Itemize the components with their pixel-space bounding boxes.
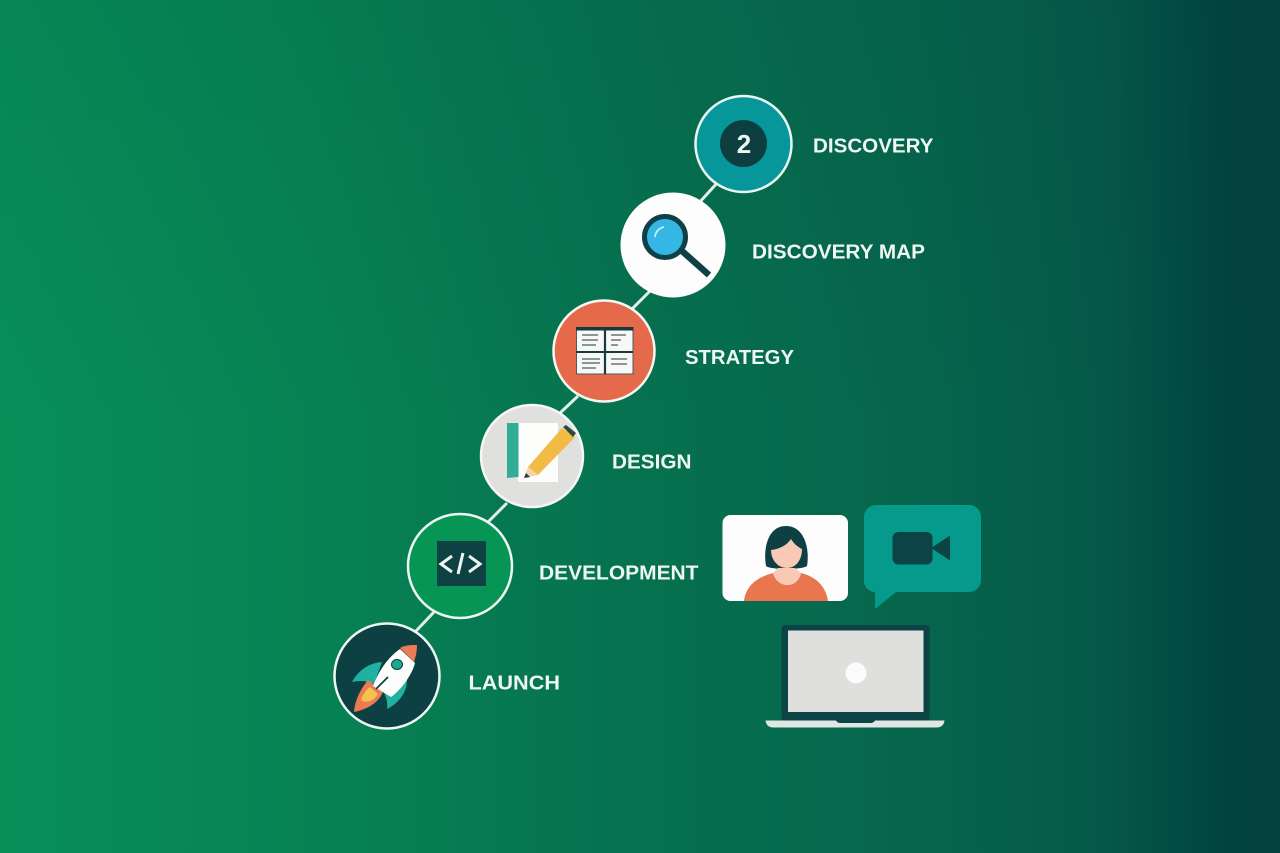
strategy label: STRATEGY [685, 347, 795, 369]
step 5: development [408, 514, 698, 618]
person hair [765, 526, 808, 569]
person video card [722, 515, 848, 601]
laptop [766, 625, 944, 728]
discovery label: DISCOVERY [813, 136, 934, 158]
step 4: design [481, 405, 692, 507]
strategy circle [554, 300, 654, 402]
icon: strategy book [576, 327, 634, 374]
speech bubble with camera [864, 505, 981, 609]
person shoulders [744, 573, 828, 601]
design circle [481, 405, 583, 507]
step 2: discovery map [620, 192, 925, 298]
launch label: LAUNCH [468, 672, 560, 694]
person neck and face [771, 539, 802, 568]
design label: DESIGN [612, 452, 692, 474]
icon: video camera [892, 532, 950, 564]
icon: code tag [437, 541, 486, 586]
development label: DEVELOPMENT [539, 562, 698, 584]
step 6: launch [334, 624, 560, 728]
icon: rocket [352, 645, 417, 712]
video call illustration [722, 505, 981, 728]
step 1: discovery [696, 96, 934, 192]
development circle [408, 514, 512, 618]
discovery map label: DISCOVERY MAP [752, 242, 925, 264]
icon: magnifying glass [644, 216, 709, 275]
connector lines between steps [416, 182, 718, 631]
discovery map circle [620, 192, 726, 298]
launch circle [334, 624, 440, 728]
number badge: 2 [737, 129, 751, 159]
play dot [846, 662, 866, 684]
discovery circle [696, 96, 792, 192]
step 3: strategy [554, 300, 795, 402]
number badge [720, 120, 767, 167]
icon: notebook and pencil [507, 423, 576, 482]
